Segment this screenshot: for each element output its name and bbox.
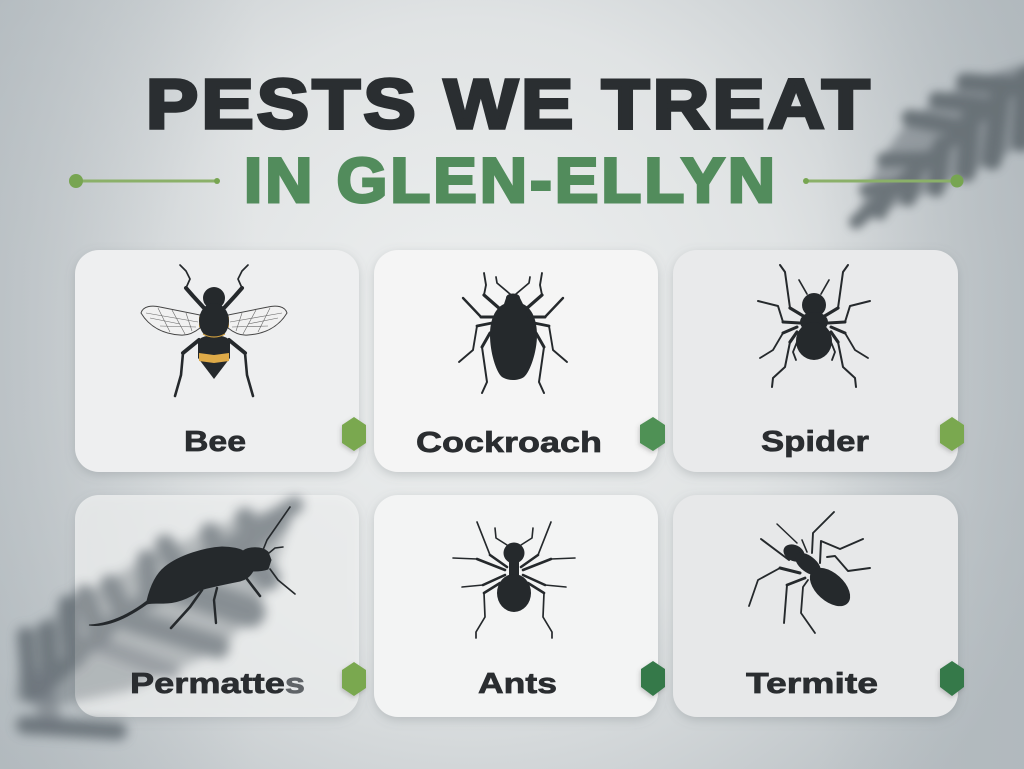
badge: hexagon <box>641 661 665 696</box>
label: Spider: Spider <box>761 426 869 458</box>
panel: spider <box>673 250 964 472</box>
label: Termite: Termite <box>746 668 878 700</box>
title: Pests We Treat: PESTS WE TREAT <box>146 65 873 143</box>
panel: permattes <box>74 495 367 722</box>
leaf shadow: bottom left <box>15 505 295 731</box>
leaf shadow seen through card <box>75 495 309 717</box>
label: Cockroach: Cockroach <box>416 427 602 459</box>
badge: hexagon <box>342 417 366 451</box>
left decorative line <box>69 174 220 188</box>
panel: bee <box>75 250 366 472</box>
icon: bee <box>141 265 287 396</box>
icon: ant <box>453 522 575 638</box>
badge: hexagon <box>640 417 665 451</box>
badge: hexagon <box>940 417 964 451</box>
icon: spider <box>758 265 870 387</box>
panel: termite <box>673 495 964 717</box>
panel: cockroach <box>374 250 665 472</box>
panel: ants <box>374 495 665 717</box>
label: Ants: Ants <box>478 668 557 700</box>
badge: hexagon <box>342 662 366 696</box>
right decorative line <box>803 174 964 188</box>
icon: cockroach <box>459 273 567 393</box>
leaf shadow: top right <box>852 62 1024 225</box>
icon: termite <box>749 512 870 633</box>
label: Permattes: Permatte s <box>130 668 305 700</box>
icon: permattes insect <box>89 507 295 628</box>
badge: hexagon <box>940 661 964 696</box>
subtitle: In Glen-Ellyn: IN GLEN-ELLYN <box>244 146 778 216</box>
label: Bee: Bee <box>184 426 246 458</box>
